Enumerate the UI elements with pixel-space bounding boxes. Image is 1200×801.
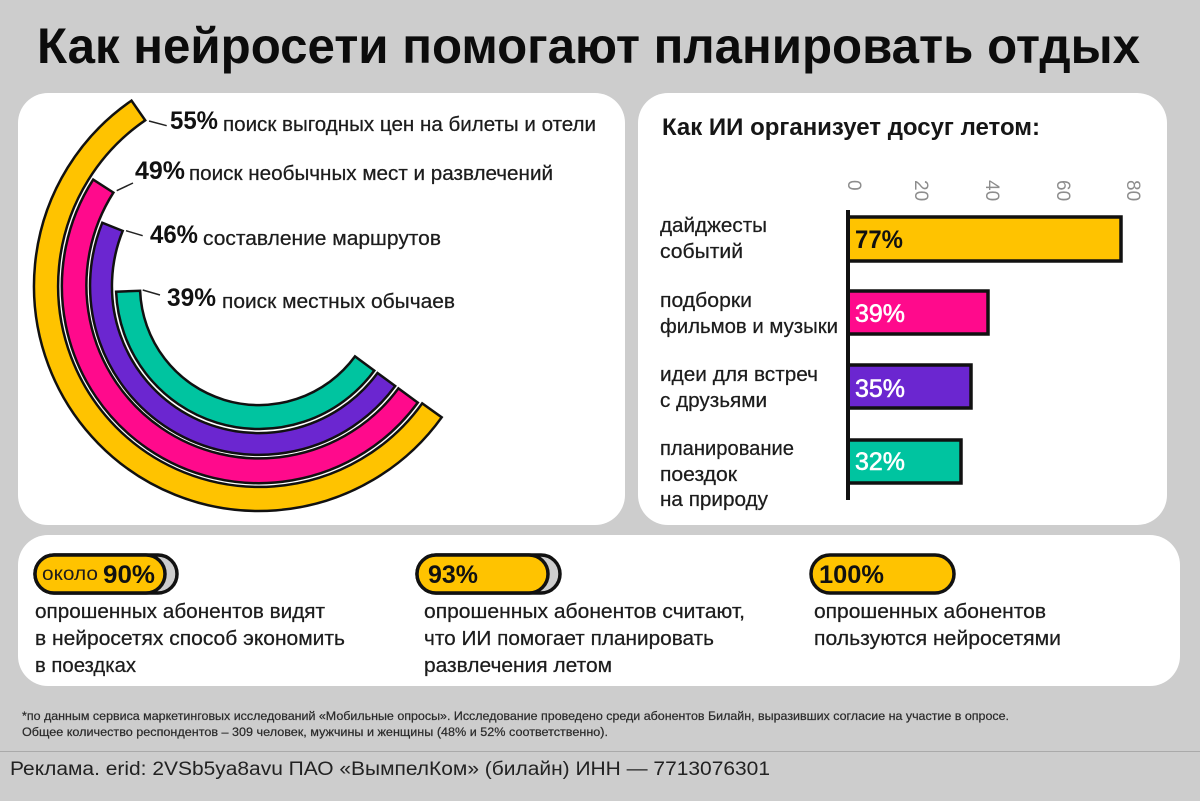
panel: bar chart of summer leisure — [638, 93, 1167, 525]
bar: teal 32%: 32% — [855, 448, 905, 476]
label 55% — [170, 107, 596, 136]
label 55%: 55% — [170, 107, 218, 135]
category label: digests — [660, 215, 767, 263]
leader line 49% — [117, 183, 133, 191]
category label: nature trips: на природу — [660, 489, 768, 511]
label 49%: 49% — [135, 157, 185, 185]
label 39%: 39% — [167, 284, 216, 312]
category label: films and music: подборки — [660, 290, 752, 312]
bar: pink 39% — [848, 291, 988, 334]
label 39% — [167, 284, 455, 313]
stat text: что ИИ помогает планировать — [424, 628, 714, 650]
leader line 55% — [149, 121, 167, 126]
pill: 93%: 93% — [428, 561, 478, 589]
panel heading: Как ИИ организует досуг летом: — [662, 114, 1040, 141]
bar: purple 35% — [848, 365, 971, 408]
bar: yellow 77% — [848, 217, 1121, 261]
bar: purple 35%: 35% — [855, 375, 905, 403]
bar: teal 32% — [848, 440, 961, 483]
bar: yellow 77%: 77% — [855, 226, 903, 254]
stat text — [424, 601, 745, 677]
axis tick labels: 20 — [910, 180, 931, 201]
stat text: в поездках — [35, 655, 136, 677]
leader line 39% — [143, 290, 160, 295]
pill: about 90% — [35, 555, 177, 593]
label 55%: поиск выгодных цен на билеты и отели — [223, 114, 596, 136]
axis tick labels: 60 — [1052, 180, 1073, 201]
category label: nature trips: поездок — [660, 464, 737, 486]
category label: meeting ideas: идеи для встреч — [660, 364, 818, 386]
stat text: в нейросетях способ экономить — [35, 628, 345, 650]
stat text: пользуются нейросетями — [814, 628, 1061, 650]
stat text — [35, 601, 345, 677]
arc: 46% purple — [90, 223, 395, 455]
stat text: развлечения летом — [424, 655, 612, 677]
arc: 55% yellow — [34, 101, 442, 511]
label 46% — [150, 221, 441, 250]
axis line — [846, 210, 850, 500]
label 46%: составление маршрутов — [203, 228, 441, 250]
axis tick labels: 0 — [843, 180, 864, 191]
category label: digests: событий — [660, 241, 743, 263]
stat: about 90% — [35, 555, 345, 677]
stat text: опрошенных абонентов считают, — [424, 601, 745, 623]
panel: key statistics — [18, 535, 1180, 686]
category label: digests: дайджесты — [660, 215, 767, 237]
title: Как нейросети помогают планировать отдых — [37, 18, 1140, 74]
stat text: опрошенных абонентов — [814, 601, 1046, 623]
arc: 39% teal — [116, 291, 374, 429]
advertising disclosure: Реклама. erid: 2VSb5ya8avu ПАО «ВымпелКом» (билайн) ИНН — 7713076301 — [10, 759, 770, 780]
pill: about 90%: около — [42, 564, 98, 585]
pill: 100% — [811, 555, 954, 593]
axis tick labels: 40 — [981, 180, 1002, 201]
footnote: *по данным сервиса маркетинговых исследований «Мобильные опросы». Исследование проведено среди абонентов Билайн, выразивших согласие на участие в опросе. — [22, 711, 1009, 723]
pill: about 90%: 90% — [103, 561, 155, 589]
category label: nature trips — [660, 438, 794, 511]
category label: nature trips: планирование — [660, 438, 794, 460]
category label: meeting ideas: с друзьями — [660, 390, 767, 412]
pill: 100%: 100% — [819, 561, 884, 589]
axis tick labels — [843, 180, 1143, 201]
axis tick labels: 80 — [1122, 180, 1143, 201]
stat text — [814, 601, 1061, 650]
category label: films and music: фильмов и музыки — [660, 316, 838, 338]
label 46%: 46% — [150, 221, 198, 249]
footnote: Общее количество респондентов – 309 человек, мужчины и женщины (48% и 52% соответственно). — [22, 727, 608, 739]
panel: radial chart of AI use — [18, 93, 625, 525]
label 39%: поиск местных обычаев — [222, 291, 455, 313]
category label: films and music — [660, 290, 838, 338]
arc: 49% pink — [62, 180, 418, 483]
label 49% — [135, 157, 553, 185]
label 49%: поиск необычных мест и развлечений — [189, 163, 553, 185]
stat: 100% — [811, 555, 1061, 650]
category label: meeting ideas — [660, 364, 818, 412]
stat text: опрошенных абонентов видят — [35, 601, 325, 623]
bar: pink 39%: 39% — [855, 300, 905, 328]
stat: 93% — [417, 555, 745, 677]
leader line 46% — [126, 231, 143, 236]
pill: 93% — [417, 555, 560, 593]
footnote — [22, 711, 1009, 739]
